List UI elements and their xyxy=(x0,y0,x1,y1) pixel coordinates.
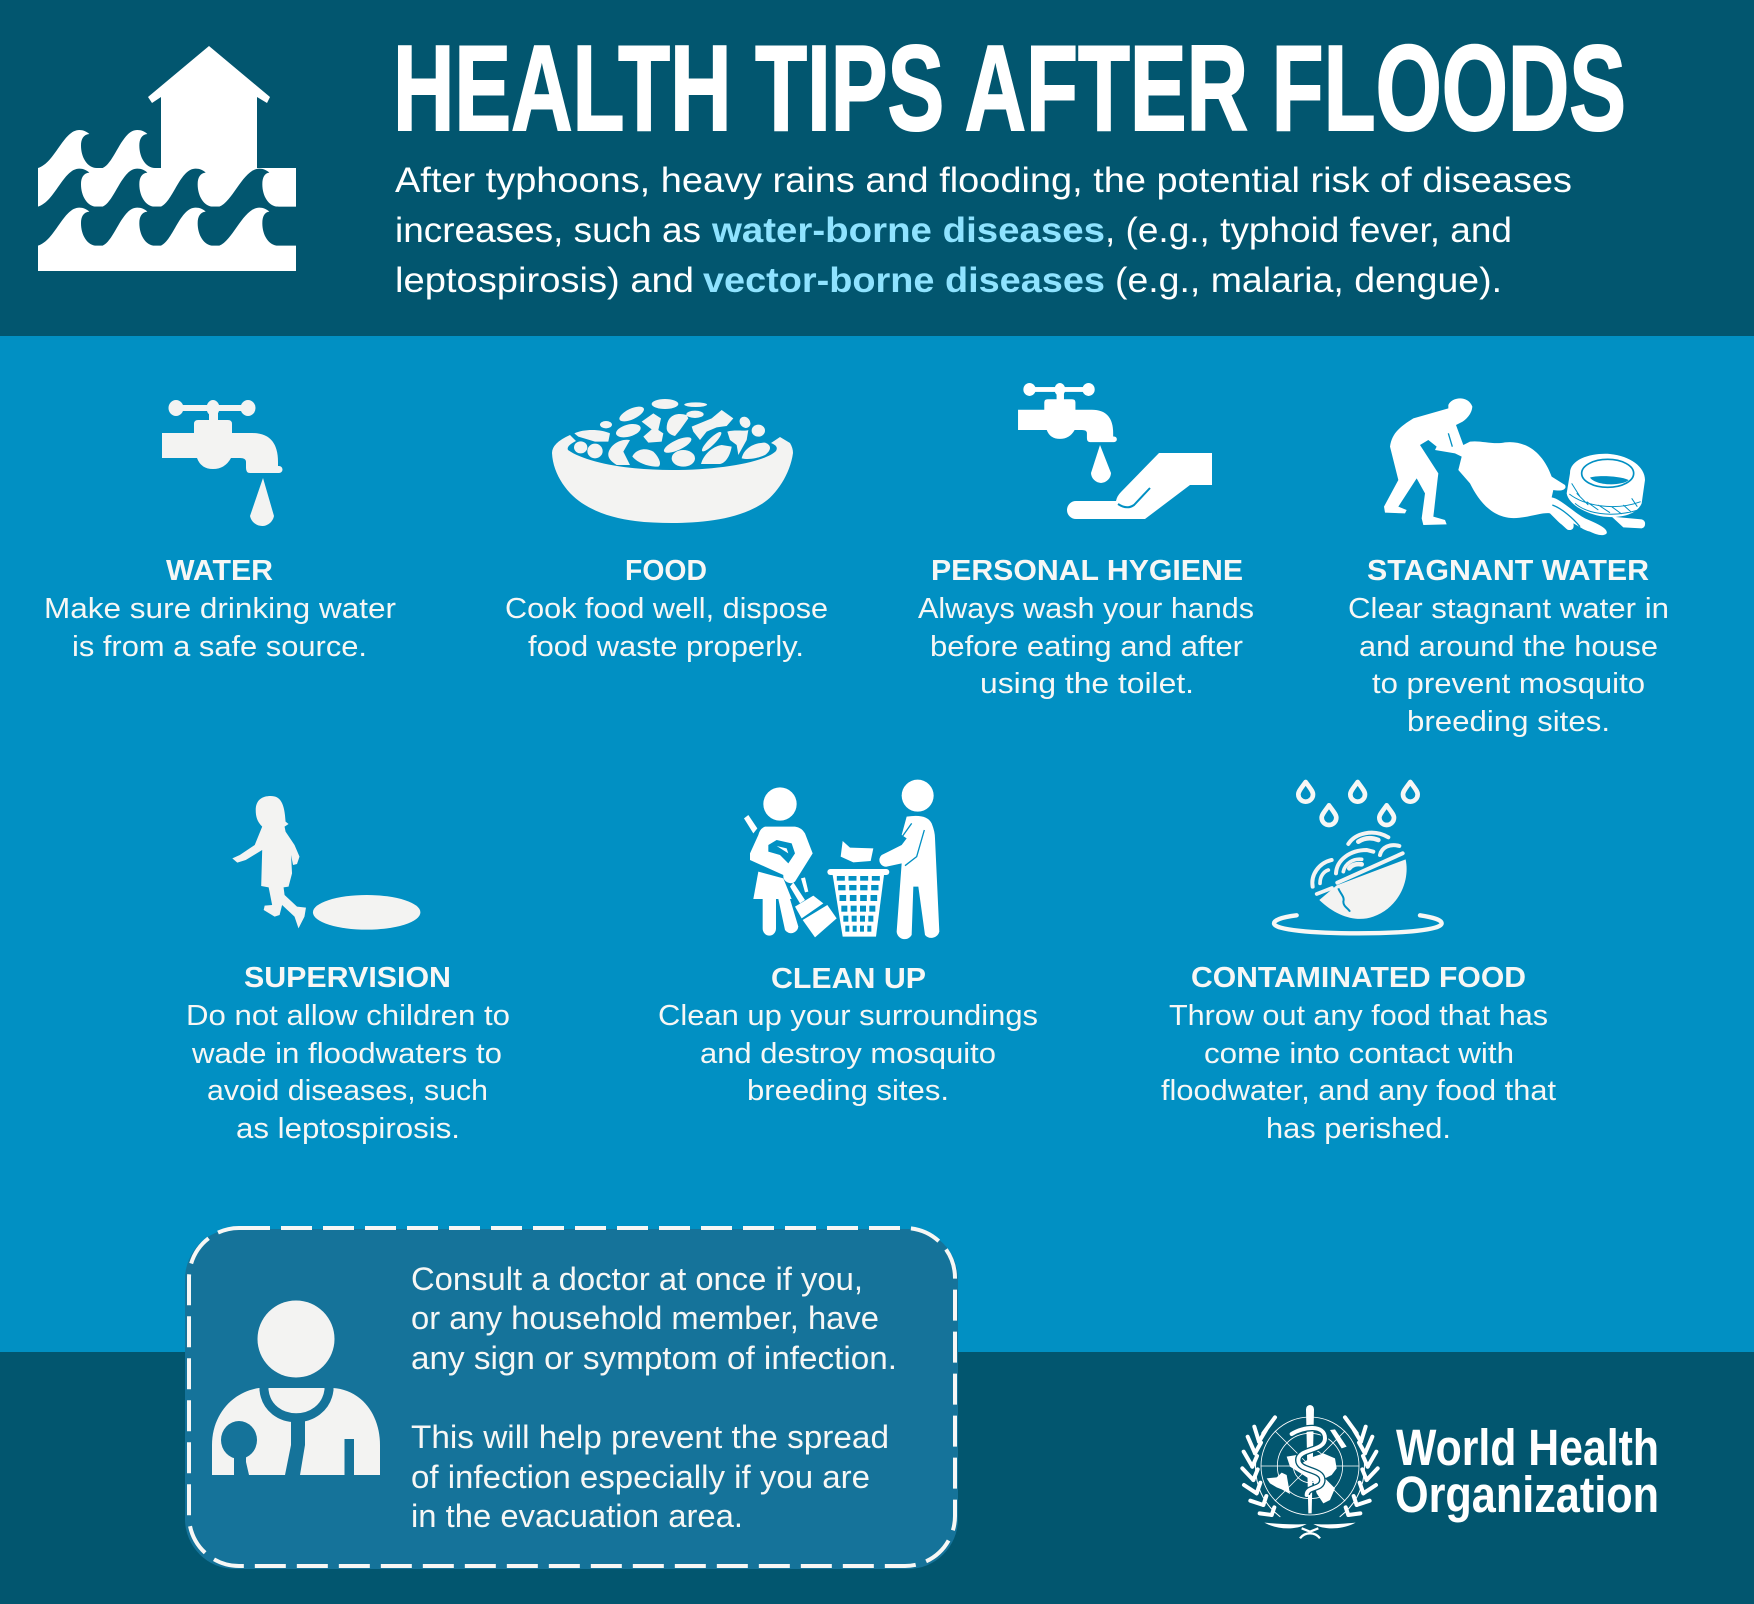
heading and text: contaminated food: has perished. xyxy=(1266,1113,1451,1145)
footer band xyxy=(0,1352,1754,1604)
logo text: World Health xyxy=(1396,1419,1659,1476)
heading and text: contaminated food: come into contact with xyxy=(1204,1038,1514,1070)
callout text: in the evacuation area. xyxy=(411,1498,743,1534)
icon: house in flood waves xyxy=(38,46,296,271)
icon: bowl of food xyxy=(552,399,793,523)
icon: WHO emblem xyxy=(1242,1405,1378,1538)
icon: doctor with stethoscope xyxy=(212,1300,380,1475)
heading and text: personal hygiene: before eating and after xyxy=(930,631,1243,663)
icon: person dragging bag to tyre xyxy=(1384,398,1645,535)
heading and text: personal hygiene: using the toilet. xyxy=(980,668,1194,700)
heading and text: stagnant water xyxy=(1348,555,1669,738)
icon: tap and washing hand xyxy=(1018,383,1212,519)
icon: contaminated bowl under rain drops xyxy=(1274,782,1442,933)
heading and text: clean up xyxy=(658,963,1038,1107)
heading and text: supervision: SUPERVISION xyxy=(244,962,451,994)
heading and text: food xyxy=(505,555,828,663)
intro text: increases, such as xyxy=(395,211,701,250)
heading and text: supervision: avoid diseases, such xyxy=(207,1075,488,1107)
heading and text: contaminated food: floodwater, and any food that xyxy=(1161,1075,1556,1107)
heading and text: water: WATER xyxy=(166,555,273,587)
logo text: Organization xyxy=(1395,1466,1659,1523)
heading and text: supervision xyxy=(186,962,510,1145)
intro text: vector-borne diseases xyxy=(703,261,1105,300)
heading and text: stagnant water: to prevent mosquito xyxy=(1372,668,1645,700)
panel: doctor callout xyxy=(185,1228,958,1569)
logo text xyxy=(1395,1419,1659,1523)
heading and text: food: food waste properly. xyxy=(528,631,804,663)
heading and text: water xyxy=(44,555,396,663)
heading and text: water: Make sure drinking water xyxy=(44,593,396,625)
heading and text: personal hygiene xyxy=(918,555,1254,700)
heading and text: supervision: as leptospirosis. xyxy=(236,1113,460,1145)
header band xyxy=(0,0,1754,336)
logo: World Health Organization xyxy=(1242,1405,1659,1538)
heading and text: clean up: Clean up your surroundings xyxy=(658,1000,1038,1032)
heading and text: supervision: wade in floodwaters to xyxy=(191,1038,502,1070)
heading and text: stagnant water: STAGNANT WATER xyxy=(1367,555,1649,587)
intro text: water-borne diseases xyxy=(711,211,1105,250)
heading and text: food: Cook food well, dispose xyxy=(505,593,828,625)
heading and text: personal hygiene: Always wash your hands xyxy=(918,593,1254,625)
heading and text: personal hygiene: PERSONAL HYGIENE xyxy=(931,555,1243,587)
intro text xyxy=(395,161,1572,300)
heading and text: contaminated food: CONTAMINATED FOOD xyxy=(1191,962,1526,994)
icon: child near floodwater xyxy=(232,796,420,930)
heading and text: stagnant water: Clear stagnant water in xyxy=(1348,593,1669,625)
intro text: After typhoons, heavy rains and flooding, the potential risk of diseases xyxy=(395,161,1572,200)
callout text: any sign or symptom of infection. xyxy=(411,1340,897,1376)
heading and text: clean up: breeding sites. xyxy=(747,1075,949,1107)
icon: two people cleaning up with basket xyxy=(744,780,939,939)
intro text: leptospirosis) and xyxy=(395,261,694,300)
heading and text: contaminated food xyxy=(1161,962,1556,1145)
heading and text: clean up: and destroy mosquito xyxy=(700,1038,996,1070)
heading and text: supervision: Do not allow children to xyxy=(186,1000,510,1032)
callout text xyxy=(411,1261,897,1534)
heading and text: clean up: CLEAN UP xyxy=(771,963,926,995)
callout text: Consult a doctor at once if you, xyxy=(411,1261,863,1297)
callout text: This will help prevent the spread xyxy=(411,1419,889,1455)
heading and text: stagnant water: and around the house xyxy=(1359,631,1658,663)
callout text: or any household member, have xyxy=(411,1300,879,1336)
callout text: of infection especially if you are xyxy=(411,1459,870,1495)
heading and text: contaminated food: Throw out any food that has xyxy=(1169,1000,1548,1032)
intro text: , (e.g., typhoid fever, and xyxy=(1105,211,1512,250)
heading and text: stagnant water: breeding sites. xyxy=(1407,706,1610,738)
heading and text: food: FOOD xyxy=(625,555,707,587)
heading and text: water: is from a safe source. xyxy=(72,631,367,663)
intro text: (e.g., malaria, dengue). xyxy=(1115,261,1502,300)
icon: water tap xyxy=(162,400,282,526)
